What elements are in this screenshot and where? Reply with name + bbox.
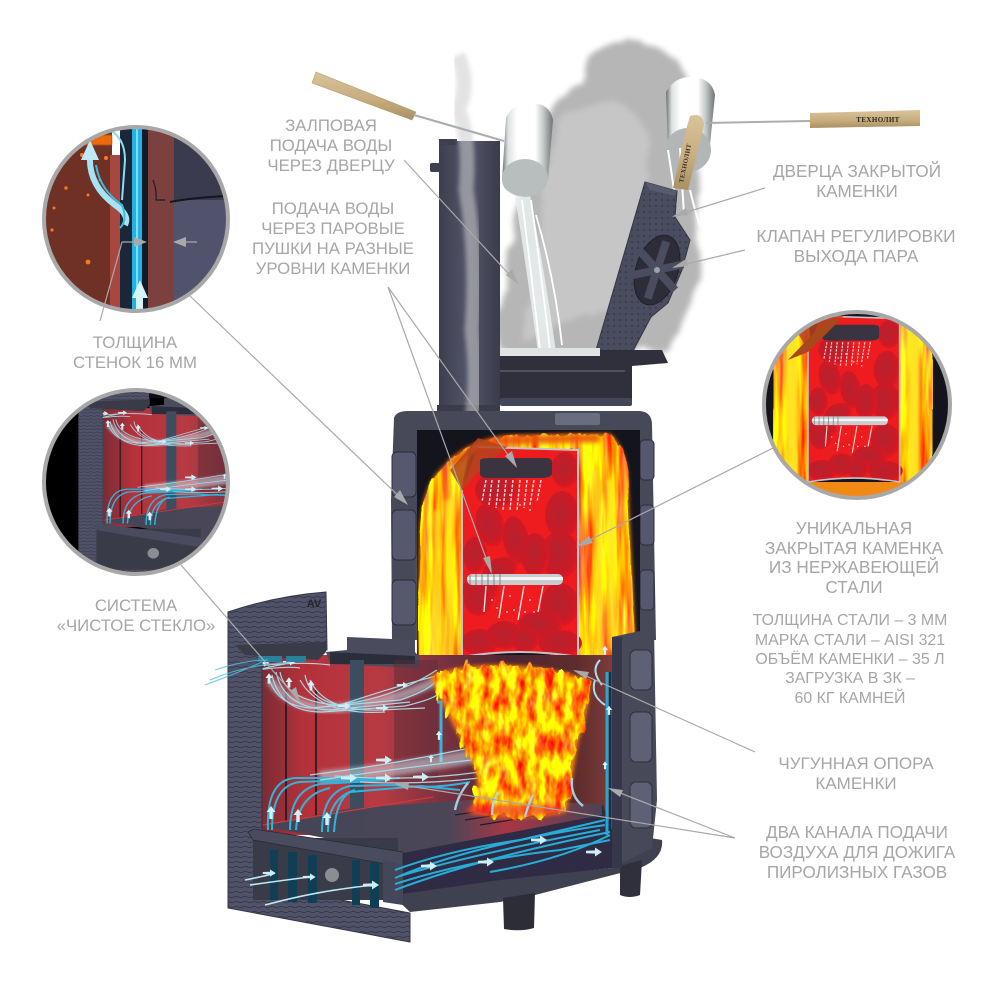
thin steam wisp over pipe: [458, 55, 475, 440]
door handle: [673, 115, 704, 190]
caption: water via steam cannons: [252, 199, 414, 278]
door top frame: [235, 642, 326, 660]
closed stainless kamenka with stones: [450, 438, 582, 657]
magnifier: wall thickness: [42, 125, 234, 321]
right air channel: [594, 646, 612, 835]
caption: wall thickness: СТЕНОК 16 ММ: [73, 353, 197, 372]
upper steam cannon: [480, 458, 552, 478]
floor plate: [262, 800, 602, 853]
caption: wall thickness: [73, 333, 197, 372]
bright flame core: [436, 470, 613, 665]
up arrow in channel: [132, 280, 148, 312]
caption: volley water feed: ЧЕРЕЗ ДВЕРЦУ: [267, 156, 395, 175]
upper water jets: [482, 480, 541, 510]
handle brand: ТЕХНОЛИТ: [856, 116, 900, 124]
door rods: [286, 690, 316, 832]
rear foot: [620, 860, 642, 897]
caption: steam valve: ВЫХОДА ПАРА: [794, 246, 919, 266]
leader lines: [181, 160, 773, 838]
water stream from left ladle: [515, 195, 562, 352]
caption: steam valve: КЛАПАН РЕГУЛИРОВКИ: [756, 226, 956, 246]
wooden handle: [312, 72, 416, 120]
sparks: [50, 153, 108, 264]
steel bucket: [666, 77, 715, 150]
caption: closed kamenka door: КАМЕНКИ: [816, 182, 898, 201]
airflow arrows: [257, 658, 429, 825]
kamenka frame: [462, 447, 578, 657]
caption: steel specifications: МАРКА СТАЛИ – AISI 321: [755, 632, 945, 649]
caption: two air channels: ДВА КАНАЛА ПОДАЧИ: [766, 823, 948, 842]
caption: steel specifications: [753, 612, 947, 707]
adjustment knob: [324, 867, 340, 883]
under-floor airflow: [395, 820, 610, 890]
caption: volley water feed: ЗАЛПОВАЯ: [285, 116, 377, 135]
stones: [461, 452, 582, 656]
main fire in firebox: [430, 665, 590, 817]
caption: water via steam cannons: ПУШКИ НА РАЗНЫЕ: [252, 239, 414, 258]
caption: two air channels: ПИРОЛИЗНЫХ ГАЗОВ: [767, 863, 947, 882]
caption: unique kamenka: [765, 518, 944, 597]
steam outlet door: [596, 182, 692, 353]
caption: volley water feed: [267, 116, 395, 175]
lower airflow: [268, 778, 470, 832]
upper airflow: [228, 663, 440, 712]
caption: two air channels: ВОЗДУХА ДЛЯ ДОЖИГА: [759, 843, 956, 862]
back wall: [262, 655, 612, 835]
caption: clean glass system: «ЧИСТОЕ СТЕКЛО»: [57, 616, 215, 635]
thickness arrows: [134, 237, 147, 247]
caption: cast iron support: [778, 754, 934, 793]
firebox interior: [228, 637, 612, 895]
caption: clean glass system: [57, 596, 215, 635]
cast iron body, upper section: [391, 411, 656, 655]
smoke duct: [350, 660, 364, 810]
lower inlet arrows: [245, 869, 379, 905]
metal rod: [706, 121, 810, 123]
caption: unique kamenka: ЗАКРЫТАЯ КАМЕНКА: [765, 538, 944, 558]
body relief plates: [392, 440, 654, 625]
caption: cast iron support: КАМЕНКИ: [815, 774, 897, 793]
caption: water via steam cannons: ПОДАЧА ВОДЫ: [272, 199, 394, 218]
steam cloud: [499, 40, 699, 362]
caption: water via steam cannons: ЧЕРЕЗ ПАРОВЫЕ: [261, 219, 405, 238]
caption: steel specifications: 60 КГ КАМНЕЙ: [795, 688, 905, 707]
steel bucket: [502, 103, 553, 197]
right ladle: [665, 77, 920, 172]
caption: cast iron support: ЧУГУННАЯ ОПОРА: [778, 754, 934, 773]
lower airflow haze: [320, 755, 480, 778]
upper shelf: [326, 637, 420, 668]
kamenka collar: [500, 348, 668, 406]
caption: unique kamenka: ИЗ НЕРЖАВЕЮЩЕЙ: [769, 557, 939, 577]
caption: two air channels: [759, 823, 956, 882]
inlet airflow through door: [205, 660, 290, 685]
grate slots: [455, 805, 560, 825]
fire glow on floor: [465, 804, 565, 816]
caption: wall thickness: ТОЛЩИНА: [93, 333, 178, 352]
magnifier: kamenka: [762, 310, 952, 500]
cast iron hearth plate and feet: [392, 838, 662, 930]
front lip and ash-pit grille: [245, 829, 403, 908]
door with cast pattern: [228, 592, 410, 942]
chimney pipe: [430, 139, 500, 427]
caption: closed kamenka door: ДВЕРЦА ЗАКРЫТОЙ: [773, 162, 941, 181]
caption: closed kamenka door: [773, 162, 941, 201]
lower steam cannon: [467, 574, 563, 585]
wooden handle: [810, 110, 920, 128]
upper airflow haze: [270, 680, 438, 708]
front foot: [503, 893, 535, 930]
magnifier: clean glass system: [42, 388, 230, 576]
caption: clean glass system: СИСТЕМА: [95, 596, 178, 615]
dark cavity: [417, 430, 640, 655]
right wall section: [612, 628, 657, 868]
caption: steel specifications: ЗАГРУЗКА В ЗК –: [785, 670, 915, 687]
metal rod: [414, 115, 504, 141]
lower water jets: [484, 586, 543, 620]
pipe flange: [430, 163, 442, 172]
caption: water via steam cannons: УРОВНИ КАМЕНКИ: [256, 259, 410, 278]
hot gas stream: [90, 128, 126, 228]
door logo: AV: [307, 598, 322, 610]
water under right ladle: [668, 148, 700, 225]
door handle: ТЕХНОЛИТ: [678, 143, 693, 183]
channel riser left of flame: [437, 702, 441, 762]
caption: unique kamenka: СТАЛИ: [825, 577, 883, 597]
valve wheel: [622, 228, 692, 312]
air jets into fire: [455, 778, 583, 817]
caption: volley water feed: ПОДАЧА ВОДЫ: [270, 136, 392, 155]
caption: steel specifications: ОБЪЁМ КАМЕНКИ – 35 Л: [755, 650, 945, 668]
caption: steam valve: [756, 226, 956, 266]
flame channels around kamenka: [419, 434, 636, 680]
caption: steel specifications: ТОЛЩИНА СТАЛИ – 3 ММ: [753, 612, 947, 629]
caption: unique kamenka: УНИКАЛЬНАЯ: [796, 518, 912, 538]
left ladle: [312, 72, 553, 197]
hot upper band: [450, 438, 600, 465]
under-floor chamber: [395, 805, 612, 895]
